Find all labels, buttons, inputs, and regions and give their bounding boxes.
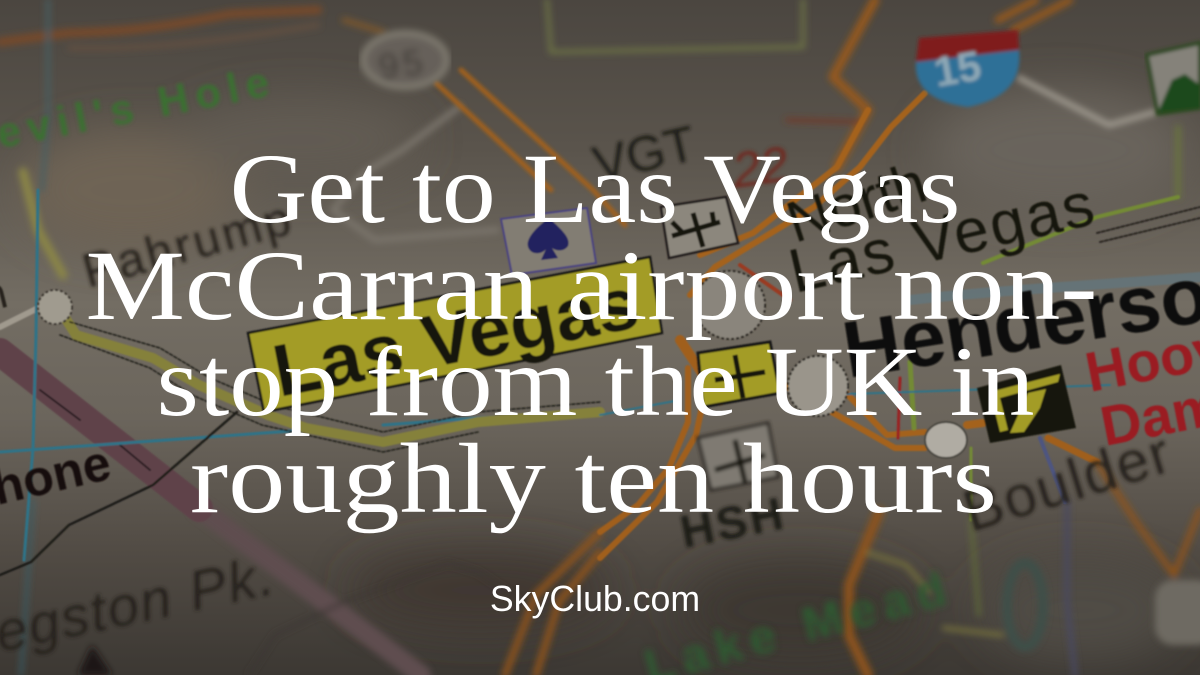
- sign: route 95 marker: 95: [376, 40, 429, 88]
- junction markers: [38, 271, 967, 458]
- icon: airport marker yellow: [698, 342, 780, 407]
- sign: I-15 shield: 15: [930, 41, 985, 96]
- map labels, out of focus: Boulder: [956, 420, 1179, 544]
- map labels, out of focus: Pahrump: [77, 192, 299, 299]
- brand: SkyClub.com: SkyClub.com: [490, 579, 700, 619]
- icon: Hoover Dam marker: [977, 365, 1076, 443]
- map labels, out of focus: evil's Hole: [0, 57, 280, 157]
- title: roughly ten hours: [190, 422, 997, 534]
- map labels, out of focus: VGT: [588, 115, 701, 193]
- map labels, out of focus: 22: [728, 136, 792, 199]
- map labels, in focus: [0, 150, 1200, 516]
- sign: I-15 shield: [916, 30, 1019, 107]
- map labels, out of focus: HSH: [676, 487, 790, 558]
- icon: airport marker north: [661, 197, 738, 258]
- sign: route 95 marker: [363, 33, 447, 88]
- map labels, in focus: Las Vegas: [783, 170, 1100, 307]
- title: McCarran airport non-: [85, 230, 1098, 340]
- title: stop from the UK in: [157, 326, 1034, 437]
- icon: airport marker south: [698, 423, 778, 490]
- in-focus roads, middle band: [0, 93, 1200, 575]
- twin orange roads, slightly soft: [436, 70, 625, 225]
- icon: spade casino marker: [501, 208, 596, 275]
- title: Get to Las Vegas: [230, 133, 960, 244]
- icon: park marker: [1147, 43, 1200, 114]
- sign: Las Vegas label: Las Vegas: [266, 261, 645, 413]
- map labels, in focus: North: [779, 150, 934, 255]
- title: [85, 133, 1098, 534]
